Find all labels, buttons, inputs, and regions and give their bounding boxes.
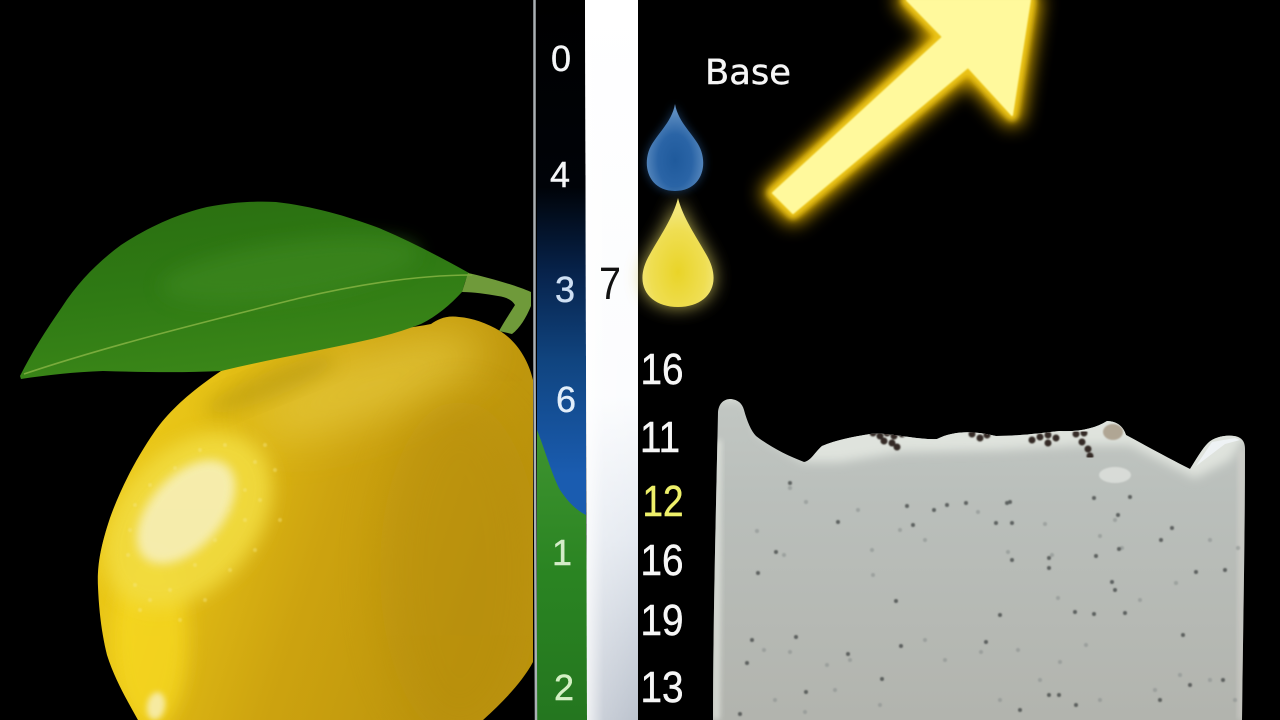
leaf sheen (157, 224, 423, 316)
left numbers (550, 38, 576, 708)
soap crumbs (873, 433, 1090, 456)
left numbers: 1 (552, 532, 572, 573)
soap specks light (757, 488, 1238, 712)
leaf (20, 202, 531, 379)
left numbers: 2 (554, 667, 574, 708)
heading: Base: Base (705, 53, 791, 93)
soap top rim highlight (720, 399, 1245, 480)
left numbers: 4 (550, 154, 570, 195)
icon: yellow drop (642, 198, 714, 307)
left numbers: 6 (556, 379, 576, 420)
leaf midrib (24, 275, 472, 374)
right numbers (640, 345, 684, 712)
leaf stem (462, 273, 531, 334)
right numbers: 16 (640, 345, 684, 394)
right numbers: 11 (640, 413, 680, 462)
arrow: glowing yellow (773, 0, 1030, 213)
pH scale: white strip (585, 0, 638, 720)
left numbers: 3 (555, 269, 575, 310)
soap specks dark (740, 483, 1225, 714)
strip number 7: 7 (599, 258, 621, 309)
pH scale: left column (534, 0, 588, 720)
right numbers: 19 (640, 596, 684, 645)
scale edge line (534, 0, 536, 720)
lemon (71, 312, 540, 720)
green section (537, 430, 588, 720)
left numbers: 0 (551, 38, 571, 79)
right numbers: 13 (640, 663, 684, 712)
lemon peel texture (128, 445, 280, 620)
right numbers: 12 (642, 477, 684, 526)
icon: blue drop (647, 104, 703, 191)
soap bar (712, 380, 1250, 720)
right numbers: 16 (640, 536, 684, 585)
